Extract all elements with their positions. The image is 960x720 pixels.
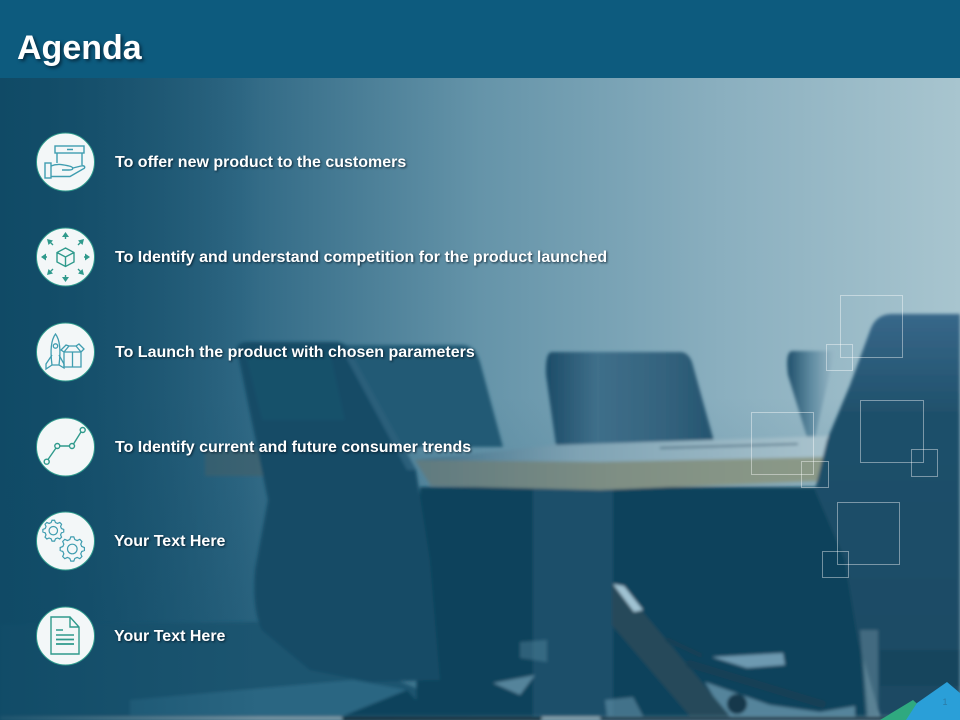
title: Agenda (17, 29, 142, 67)
table column (533, 489, 613, 716)
corner accent with page number: 1 (942, 697, 948, 707)
agenda text: To Identify and understand competition for the product launched (115, 249, 607, 266)
chair back highlight (342, 350, 416, 470)
icon: rocket and boxes (36, 322, 95, 382)
table paper (660, 444, 798, 448)
agenda item 4 (36, 418, 473, 476)
bottom strip (0, 717, 960, 720)
agenda text: To offer new product to the customers (115, 154, 406, 171)
chair lumbar (245, 352, 345, 420)
chair base (668, 640, 822, 714)
agenda text: Your Text Here (114, 628, 225, 645)
right chair lower strip (860, 630, 878, 716)
icon: gears (36, 512, 95, 570)
table edge (415, 457, 826, 490)
foreground left chair (237, 342, 440, 682)
agenda item 1 (36, 132, 408, 192)
right large chair (815, 314, 960, 716)
right chair dark band (880, 650, 960, 686)
floor patches (493, 640, 855, 716)
agenda text: Your Text Here (114, 533, 225, 550)
agenda text: To Launch the product with chosen parameters (115, 344, 475, 361)
leg highlight (613, 584, 643, 612)
under table dark mass (416, 487, 868, 716)
icon: box with arrows (36, 228, 95, 286)
icon: hand holding box (36, 132, 95, 192)
chair three (546, 352, 715, 445)
agenda item 5 (36, 512, 227, 570)
icon: trend line (36, 418, 95, 476)
table surface (415, 436, 828, 462)
header bar (0, 0, 960, 78)
table leg (612, 584, 730, 716)
corner accent with page number (880, 682, 960, 720)
agenda item 3 (36, 322, 476, 382)
icon: document (36, 606, 95, 666)
far left table and floor (0, 450, 430, 716)
agenda text: To Identify current and future consumer trends (115, 439, 471, 456)
agenda item 2 (36, 228, 608, 286)
rear chair (345, 345, 503, 447)
chair four (787, 351, 835, 437)
agenda item 6 (36, 606, 227, 666)
